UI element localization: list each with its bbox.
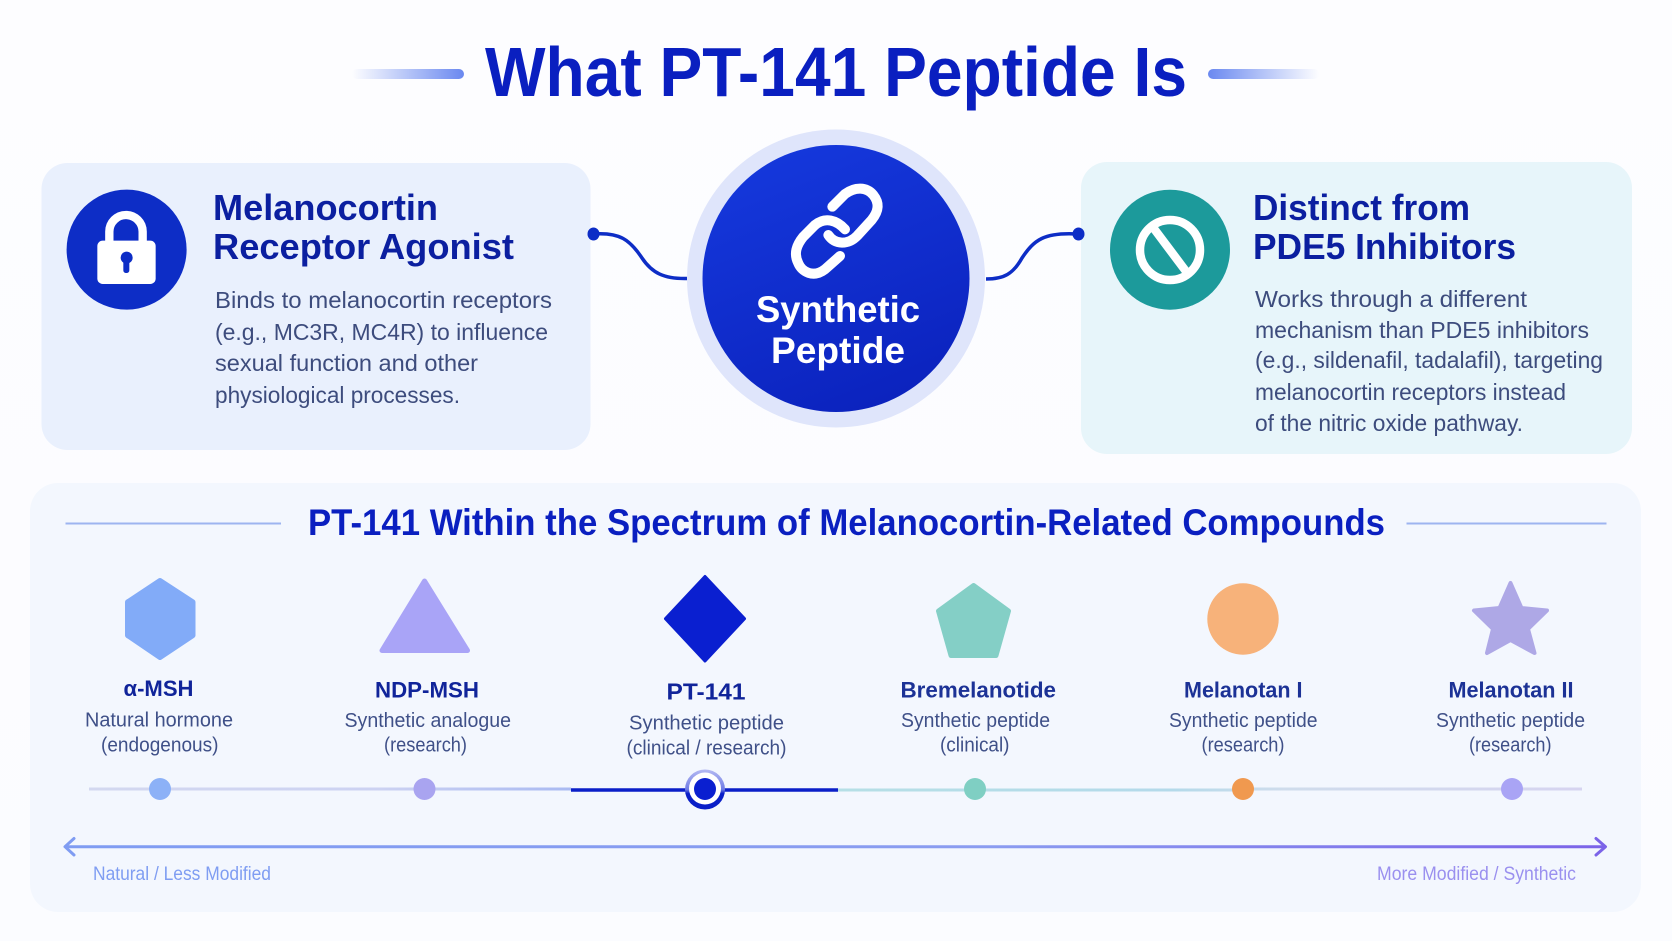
body text: melanocortin receptors instead xyxy=(1255,379,1566,405)
heading: Distinct from xyxy=(1253,187,1470,228)
compound: Melanotan I xyxy=(1169,583,1318,800)
heading: Melanocortin xyxy=(213,187,438,228)
panel: spectrum of compounds xyxy=(30,483,1641,912)
compound: PT-141 xyxy=(626,576,786,810)
compound: NDP-MSH xyxy=(344,581,511,800)
axis label left: Natural / Less Modified xyxy=(93,863,271,885)
title accent left xyxy=(352,69,464,79)
title text: What PT-141 Peptide Is xyxy=(485,33,1187,111)
body text: (e.g., MC3R, MC4R) to influence xyxy=(215,319,548,345)
body text: physiological processes. xyxy=(215,382,460,408)
body text: (e.g., sildenafil, tadalafil), targeting xyxy=(1255,347,1603,373)
compound: PT-141: Synthetic peptide xyxy=(629,712,784,734)
heading: PDE5 Inhibitors xyxy=(1253,226,1516,267)
body text: mechanism than PDE5 inhibitors xyxy=(1255,317,1589,343)
compound: Melanotan II xyxy=(1436,583,1585,800)
icon: chain link xyxy=(796,189,878,274)
compound: NDP-MSH: NDP-MSH xyxy=(375,678,479,702)
connector right xyxy=(986,228,1084,279)
compound: Melanotan I: Melanotan I xyxy=(1184,678,1302,702)
panel: melanocortin receptor agonist xyxy=(42,163,590,450)
compound: alpha-MSH: Natural hormone xyxy=(85,710,233,732)
arrow: modification axis xyxy=(65,838,1606,855)
compound: Melanotan II: Synthetic peptide xyxy=(1436,710,1585,732)
compound: Melanotan I: (research) xyxy=(1202,734,1284,756)
compound: PT-141: PT-141 xyxy=(666,678,746,704)
central badge: synthetic peptide xyxy=(687,130,985,428)
badge text: Synthetic xyxy=(756,289,920,330)
icon: prohibition sign xyxy=(1110,190,1230,310)
compound: Bremelanotide: Bremelanotide xyxy=(900,678,1056,702)
body text: of the nitric oxide pathway. xyxy=(1255,410,1523,436)
compound: Bremelanotide xyxy=(900,586,1056,800)
icon: padlock xyxy=(67,190,187,310)
compound: NDP-MSH: Synthetic analogue xyxy=(344,710,511,732)
connector left xyxy=(588,228,687,279)
compound: Bremelanotide: (clinical) xyxy=(940,734,1010,756)
body text: sexual function and other xyxy=(215,350,478,376)
heading xyxy=(1253,187,1516,267)
compound: alpha-MSH: (endogenous) xyxy=(101,734,218,756)
compound: NDP-MSH: (research) xyxy=(384,734,467,756)
heading: Receptor Agonist xyxy=(213,226,514,267)
compound: Melanotan II: Melanotan II xyxy=(1448,678,1574,702)
badge text: Peptide xyxy=(771,330,905,371)
compound: alpha-MSH xyxy=(85,580,233,800)
body text: Binds to melanocortin receptors xyxy=(215,287,552,313)
compound: Melanotan I: Synthetic peptide xyxy=(1169,710,1318,732)
body text xyxy=(1255,286,1603,436)
compound: PT-141: (clinical / research) xyxy=(626,738,786,760)
compound: Melanotan II: (research) xyxy=(1469,734,1552,756)
compound: alpha-MSH: α-MSH xyxy=(124,676,194,701)
section heading: PT-141 Within the Spectrum of Melanocortin-Related Compounds xyxy=(308,502,1385,543)
timeline line xyxy=(89,789,1582,790)
title accent right xyxy=(1208,69,1319,79)
body text xyxy=(215,287,552,408)
heading xyxy=(213,187,514,267)
title xyxy=(352,33,1319,111)
body text: Works through a different xyxy=(1255,286,1528,312)
badge text xyxy=(756,289,920,371)
panel: distinct from PDE5 inhibitors xyxy=(1081,162,1632,454)
axis label right: More Modified / Synthetic xyxy=(1377,863,1576,885)
compound: Bremelanotide: Synthetic peptide xyxy=(901,710,1050,732)
